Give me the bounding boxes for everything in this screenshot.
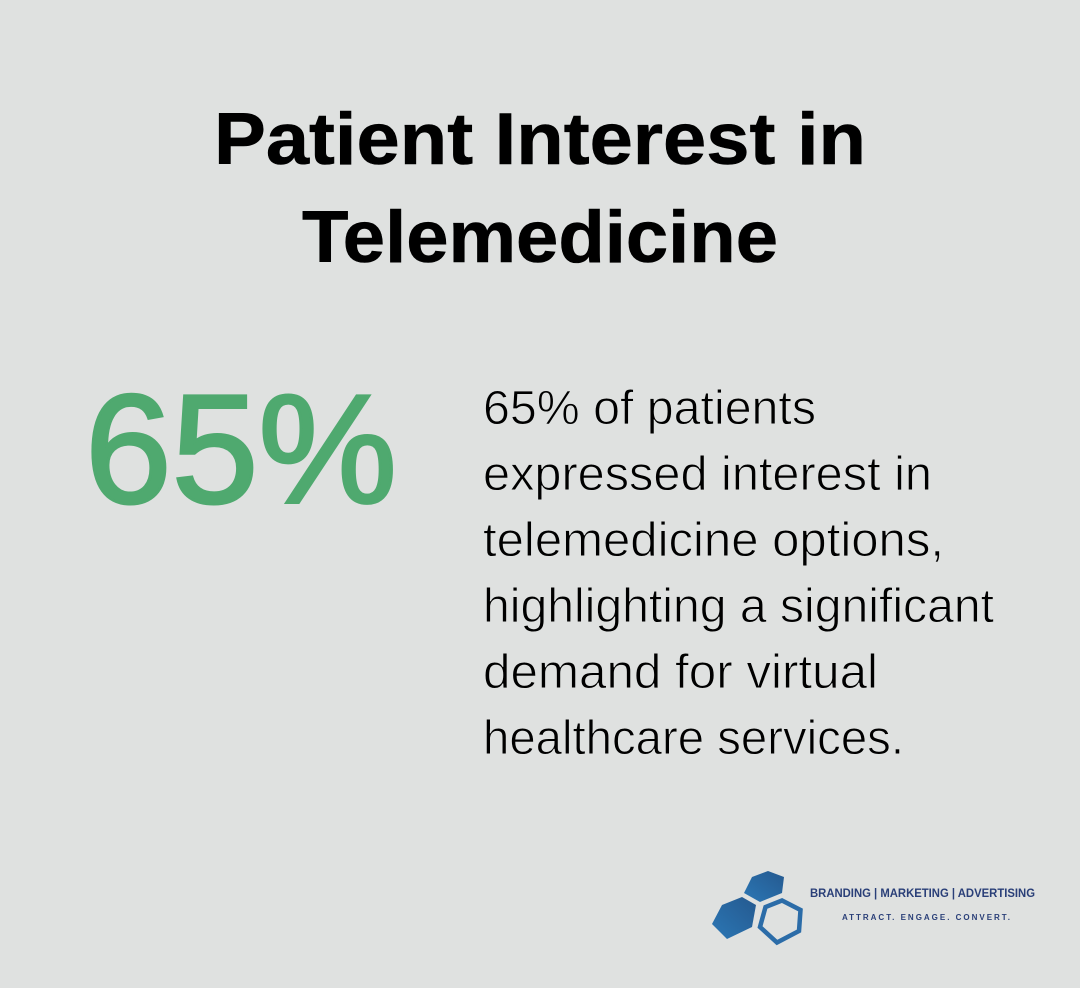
title xyxy=(214,99,866,278)
description text block: 65% of patients xyxy=(483,382,816,435)
logo text: tagline: ATTRACT. ENGAGE. CONVERT. xyxy=(842,913,1010,922)
description text block xyxy=(483,382,994,765)
logo text: services line: BRANDING | MARKETING | ADVERTISING xyxy=(810,888,1035,900)
description text block: telemedicine options, xyxy=(483,514,944,567)
logo xyxy=(712,871,1035,942)
description text block: healthcare services. xyxy=(483,712,904,765)
description text block: demand for virtual xyxy=(483,646,878,699)
icon: top solid hexagon xyxy=(744,871,784,902)
title: Patient Interest in xyxy=(214,99,866,180)
title: Telemedicine xyxy=(302,197,778,278)
icon: outlined hexagon xyxy=(760,900,800,942)
description text block: expressed interest in xyxy=(483,448,932,501)
description text block: highlighting a significant xyxy=(483,580,994,633)
icon: left solid hexagon xyxy=(712,897,756,939)
big statistic: 65%: 65% xyxy=(85,362,397,536)
